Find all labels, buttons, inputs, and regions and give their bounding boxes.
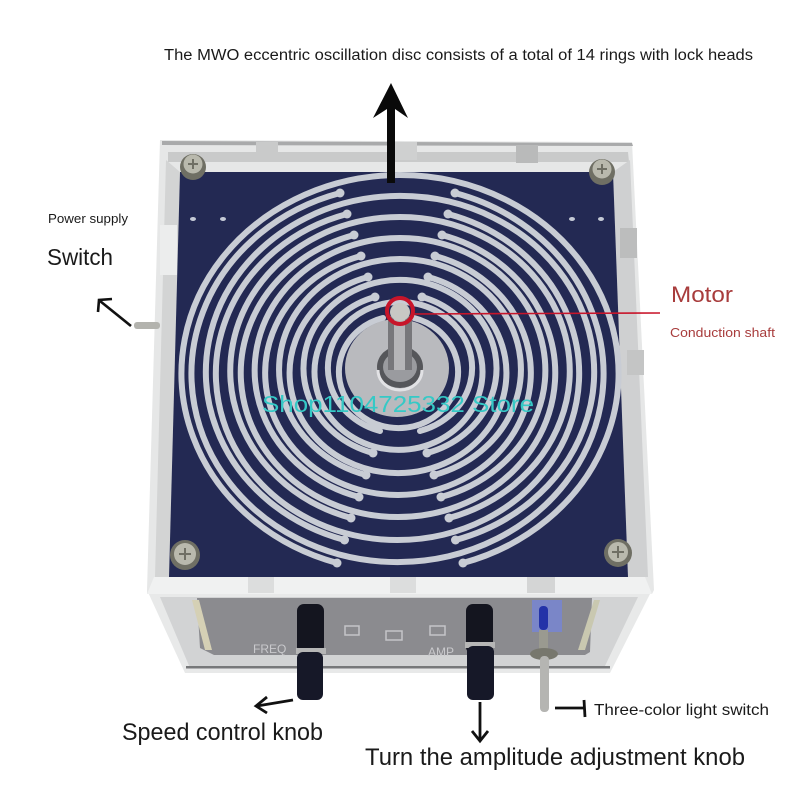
arrow: speed knob [256, 697, 293, 713]
power supply label: Power supply [48, 211, 129, 226]
amplitude knob [465, 604, 495, 700]
conduction shaft label: Conduction shaft [670, 325, 775, 340]
top acrylic frame [147, 140, 654, 594]
light switch label: Three-color light switch [594, 702, 769, 719]
front face of box: AMP [428, 645, 454, 659]
power switch lever [134, 322, 160, 329]
navy disc board [169, 172, 628, 577]
silver hub and shaft [345, 303, 449, 417]
front face of box [147, 590, 652, 673]
arrow: light switch [555, 700, 585, 717]
watermark: Shop1104725332 Store [262, 391, 534, 417]
switch label: Switch [47, 244, 113, 270]
mounting holes [190, 217, 604, 221]
front face of box: FREQ [253, 642, 286, 656]
frequency knob [296, 604, 326, 700]
three-colour light toggle [530, 600, 562, 712]
arrow: up to disc [373, 83, 408, 183]
motor callout marker [387, 298, 660, 324]
arrow: to power switch [98, 299, 131, 326]
product: acrylic box [134, 140, 654, 712]
speed control label: Speed control knob [122, 719, 323, 746]
ring lock heads [332, 188, 468, 568]
screws [170, 154, 632, 570]
motor label: Motor [671, 282, 733, 307]
title: The MWO eccentric oscillation disc consists of a total of 14 rings with lock heads [164, 47, 753, 64]
concentric rings with lock heads [182, 175, 619, 563]
arrow: amplitude knob [472, 702, 488, 741]
amplitude label: Turn the amplitude adjustment knob [365, 744, 745, 771]
